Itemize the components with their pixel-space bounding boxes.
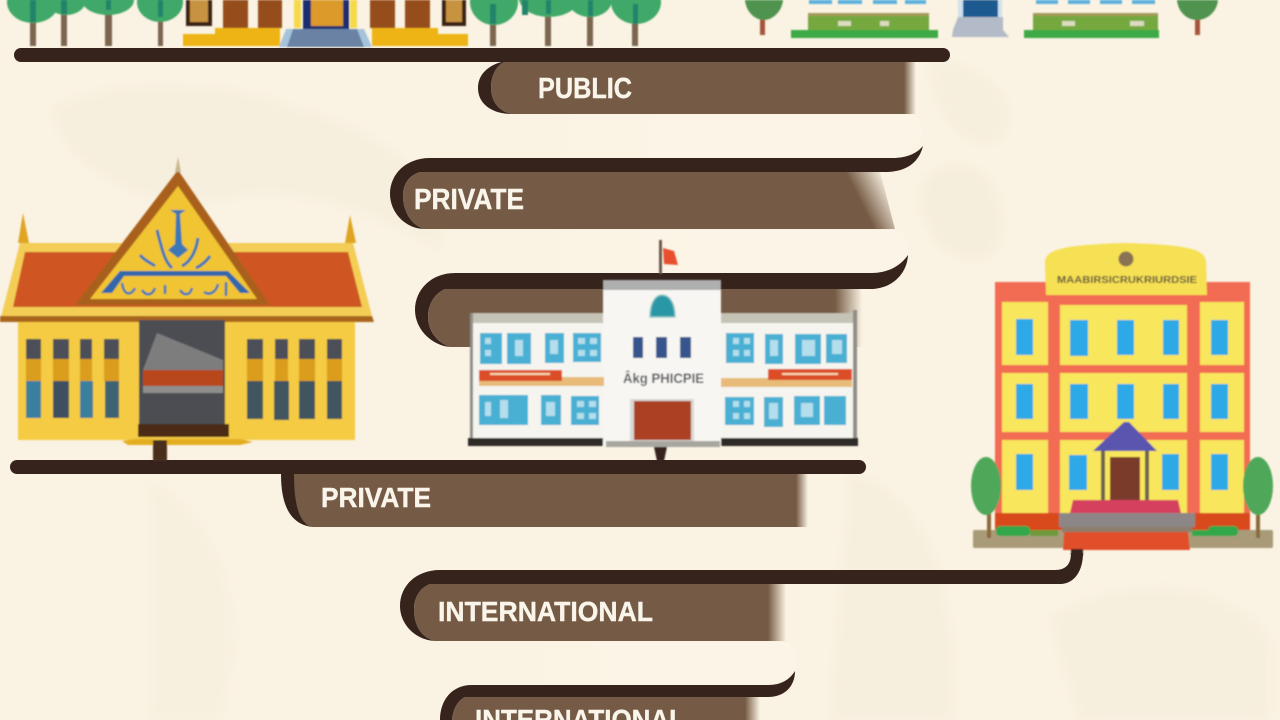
base	[995, 513, 1250, 531]
entrance	[139, 320, 225, 425]
building: white school with flag	[468, 240, 858, 461]
building sign text: Âkg PHICPIE	[623, 369, 704, 386]
entrance step	[138, 424, 229, 437]
front steps	[1059, 500, 1195, 550]
red door	[630, 399, 694, 441]
temple columns and steps	[183, 0, 468, 47]
label: public: PUBLIC	[538, 73, 632, 105]
top shelf bar	[14, 48, 950, 62]
windows	[1016, 319, 1228, 490]
window panes	[485, 338, 842, 419]
roof sign	[1045, 243, 1207, 295]
post to shelf	[153, 436, 167, 461]
ribbon: private lower	[281, 474, 808, 527]
top right school fragment	[745, 0, 1218, 38]
ribbon: public	[478, 60, 916, 114]
building: traditional Khmer-style school	[0, 157, 374, 461]
central windows	[633, 337, 691, 358]
ribbon: international upper	[400, 553, 1083, 641]
ground	[973, 530, 1273, 548]
building body	[18, 320, 355, 440]
gable	[75, 157, 270, 305]
main facade	[995, 282, 1250, 520]
sign text: MAABIRSICRUKRIURDSIE	[1057, 275, 1197, 286]
left hedge	[791, 13, 938, 38]
trees right of temple	[470, 0, 661, 46]
trees left of temple	[7, 0, 183, 46]
label: private upper: PRIVATE	[414, 184, 524, 216]
building: yellow and coral school	[971, 243, 1273, 555]
connector stub	[1071, 549, 1083, 555]
left windows	[479, 333, 601, 425]
gold base	[122, 439, 253, 445]
flag	[659, 240, 678, 274]
right windows	[725, 333, 847, 427]
right banner	[721, 369, 852, 387]
bushes	[996, 526, 1238, 536]
entrance door and steps	[952, 0, 1009, 37]
right tree	[1243, 457, 1273, 538]
right hedge	[1024, 13, 1159, 38]
left tree	[971, 457, 1001, 538]
right wing	[719, 310, 858, 446]
label: international upper: INTERNATIONAL	[438, 596, 653, 627]
soft cream tabs between ribbons	[500, 115, 922, 685]
ribbon: private upper	[390, 146, 923, 229]
ribbon: international lower	[440, 671, 795, 720]
left banner	[479, 370, 604, 386]
post to shelf	[654, 447, 667, 461]
blue window fragments	[809, 0, 1155, 4]
left windows	[26, 339, 119, 418]
side finials	[18, 213, 356, 243]
arch window	[650, 295, 675, 317]
roof	[0, 243, 374, 322]
central block	[603, 280, 721, 447]
porch	[1093, 422, 1157, 502]
left wing	[468, 313, 608, 446]
tree right	[1177, 0, 1218, 35]
medallion	[1118, 252, 1134, 266]
ribbon: behind school building	[415, 255, 908, 347]
yellow panels	[1002, 302, 1244, 514]
top left trees and temple fragment	[7, 0, 661, 47]
label: private lower: PRIVATE	[321, 482, 431, 513]
tree left	[745, 0, 783, 35]
right windows	[247, 339, 342, 420]
middle shelf bar	[10, 460, 866, 474]
